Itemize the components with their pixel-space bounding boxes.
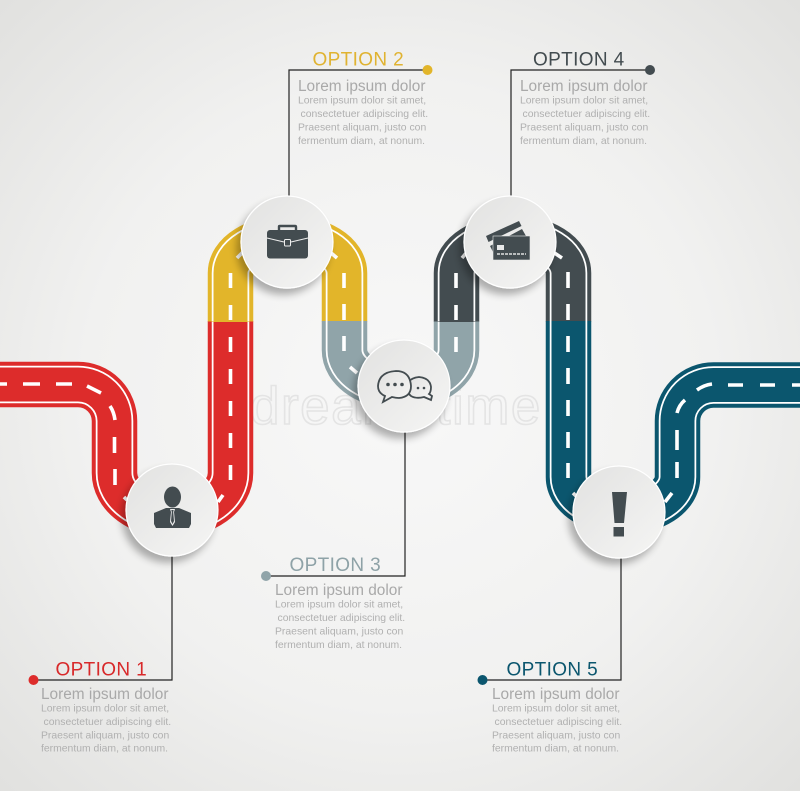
- body: option 5: Praesent aliquam, justo con: [492, 730, 620, 742]
- body: option 4: consectetuer adipiscing elit.: [522, 109, 650, 120]
- connector: option 4: [511, 65, 655, 200]
- icon: exclamation mark: [612, 492, 627, 536]
- connector: option 1: [28, 550, 172, 685]
- badge: credit cards icon: [464, 196, 556, 288]
- body: option 5: [492, 686, 622, 754]
- badge: briefcase icon: [241, 196, 333, 288]
- body: option 5: Lorem ipsum dolor: [492, 686, 619, 703]
- road: [0, 238, 800, 515]
- heading: option 4: OPTION 4: [533, 50, 625, 70]
- icon: businessman: [154, 486, 191, 528]
- body: option 1: Lorem ipsum dolor sit amet,: [41, 704, 169, 714]
- body: option 2: consectetuer adipiscing elit.: [300, 109, 428, 120]
- road segment: gray: [344, 321, 456, 387]
- body: option 4: Lorem ipsum dolor: [520, 78, 647, 95]
- body: option 5: consectetuer adipiscing elit.: [494, 717, 622, 728]
- body: option 4: Praesent aliquam, justo con: [520, 122, 648, 134]
- body: option 2: fermentum diam, at nonum.: [298, 136, 425, 147]
- body: option 3: consectetuer adipiscing elit.: [278, 613, 405, 624]
- road segment: yellow: [230, 238, 344, 322]
- badge: exclamation icon: [573, 466, 665, 558]
- road segment: teal: [568, 321, 800, 512]
- connector: option 5: [478, 550, 621, 685]
- body: option 3: Praesent aliquam, justo con: [275, 626, 403, 638]
- badge: person icon: [126, 464, 218, 556]
- body: option 3: Lorem ipsum dolor sit amet,: [275, 600, 403, 610]
- heading: option 2: OPTION 2: [312, 50, 404, 70]
- body: option 1: Praesent aliquam, justo con: [41, 730, 169, 742]
- text block: option 3: [275, 555, 405, 651]
- text block: option 2: [298, 50, 428, 147]
- badge: chat icon: [358, 340, 450, 432]
- icon: credit cards: [486, 221, 530, 260]
- road segment: dark: [456, 238, 568, 322]
- body: option 2: Praesent aliquam, justo con: [298, 122, 426, 134]
- body: option 4: [520, 78, 650, 147]
- heading: option 1: OPTION 1: [56, 660, 147, 680]
- connector: option 3: [261, 425, 405, 581]
- body: option 1: consectetuer adipiscing elit.: [44, 717, 171, 728]
- road segment: red: [0, 321, 230, 515]
- body: option 3: fermentum diam, at nonum.: [275, 640, 402, 651]
- connector: option 2: [289, 65, 432, 200]
- body: option 2: Lorem ipsum dolor sit amet,: [298, 96, 426, 106]
- body: option 3: [275, 582, 405, 651]
- body: option 4: Lorem ipsum dolor sit amet,: [520, 96, 648, 106]
- body: option 5: fermentum diam, at nonum.: [492, 744, 619, 754]
- body: option 1: Lorem ipsum dolor: [41, 686, 168, 703]
- icon: speech bubbles: [378, 371, 432, 402]
- body: option 3: Lorem ipsum dolor: [275, 582, 402, 599]
- heading: option 5: OPTION 5: [506, 660, 598, 680]
- watermark: dreamstime: [250, 377, 542, 436]
- body: option 5: Lorem ipsum dolor sit amet,: [492, 704, 620, 714]
- heading: option 3: OPTION 3: [290, 555, 381, 576]
- text block: option 5: [492, 660, 622, 754]
- text block: option 4: [520, 50, 650, 147]
- text block: option 1: [41, 660, 171, 754]
- icon: briefcase: [267, 226, 308, 258]
- body: option 2: Lorem ipsum dolor: [298, 78, 425, 95]
- body: option 1: fermentum diam, at nonum.: [41, 744, 168, 754]
- body: option 1: [41, 686, 171, 754]
- body: option 2: [298, 78, 428, 147]
- body: option 4: fermentum diam, at nonum.: [520, 136, 647, 147]
